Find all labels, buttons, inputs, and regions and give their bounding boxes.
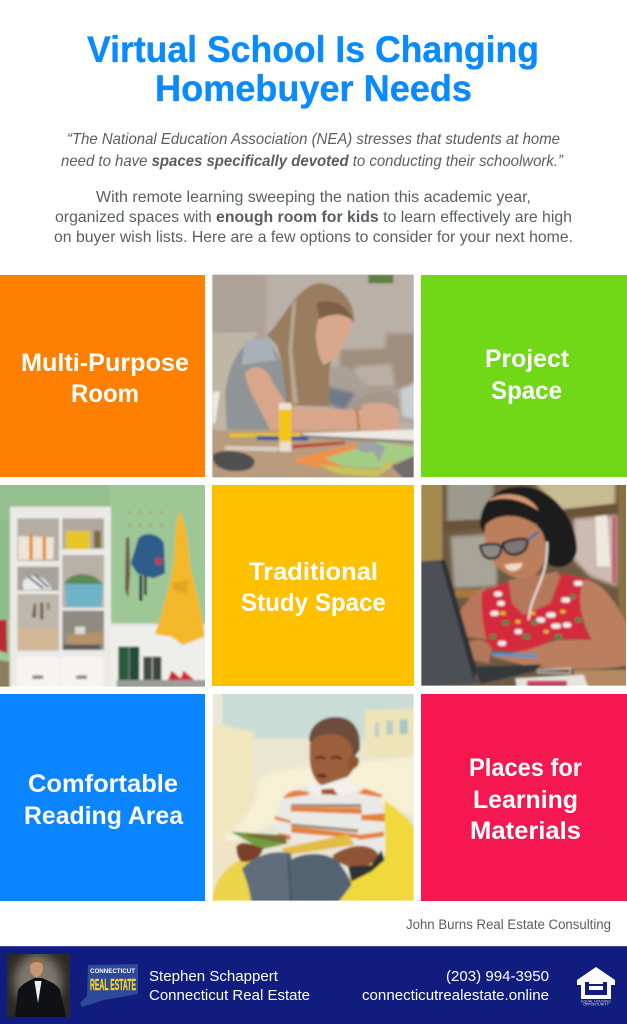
quote text block: “The National Education Association (NEA) stresses that students at home xyxy=(67,131,560,148)
panel: comfortable reading area: Reading Area xyxy=(24,802,184,830)
photo: mudroom with shelves, backpack and raincoat xyxy=(0,482,208,690)
panel: places for learning materials: Learning xyxy=(473,786,578,814)
contact details: (203) 994-3950 xyxy=(446,968,549,985)
title xyxy=(87,28,539,109)
panel: project space: Space xyxy=(491,377,562,405)
panel: multi-purpose room: Room xyxy=(71,380,139,408)
photo: girl working on a craft project at a table xyxy=(209,272,417,480)
intro text block: organized spaces with enough room for kids to learn effectively are high xyxy=(55,209,572,226)
agent portrait xyxy=(7,954,70,1017)
panel: project space xyxy=(421,275,627,477)
panel: places for learning materials xyxy=(421,694,627,901)
quote text block xyxy=(61,131,564,170)
panel: project space: Project xyxy=(485,345,570,373)
photo: boy reading on a yellow beanbag xyxy=(210,691,417,904)
quote text block: need to have spaces specifically devoted to conducting their schoolwork.” xyxy=(61,153,564,170)
panel: traditional study space: Traditional xyxy=(249,558,378,586)
intro text block xyxy=(54,189,573,246)
contact details: connecticutrealestate.online xyxy=(362,987,549,1004)
panel: traditional study space: Study Space xyxy=(241,589,386,617)
panel: traditional study space xyxy=(212,485,414,686)
source credit: John Burns Real Estate Consulting xyxy=(406,917,611,932)
panel: multi-purpose room: Multi-Purpose xyxy=(21,349,189,377)
icon: equal housing opportunity: OPPORTUNITY xyxy=(583,1002,610,1006)
title: Virtual School Is Changing xyxy=(87,28,539,70)
photo: girl with glasses and laptop xyxy=(418,482,627,689)
agent name xyxy=(149,968,310,1004)
logo: Connecticut Real Estate: CONNECTICUT xyxy=(90,968,135,975)
footer bar xyxy=(0,946,627,1024)
panel: multi-purpose room xyxy=(0,275,205,477)
intro text block: on buyer wish lists. Here are a few options to consider for your next home. xyxy=(54,229,573,246)
panel: places for learning materials: Materials xyxy=(470,817,581,845)
logo: Connecticut Real Estate xyxy=(80,964,138,1007)
contact details xyxy=(362,968,549,1004)
agent name: Stephen Schappert xyxy=(149,968,279,985)
panel: places for learning materials: Places for xyxy=(469,754,582,782)
footer bar: REAL ESTATE xyxy=(90,977,136,994)
icon: equal housing opportunity: EQUAL HOUSING xyxy=(581,1000,611,1004)
agent name: Connecticut Real Estate xyxy=(149,987,310,1004)
intro text block: With remote learning sweeping the nation this academic year, xyxy=(96,189,531,206)
panel: comfortable reading area: Comfortable xyxy=(28,770,178,798)
title: Homebuyer Needs xyxy=(155,67,472,109)
panel: comfortable reading area xyxy=(0,694,205,901)
icon: equal housing opportunity xyxy=(577,967,615,1006)
